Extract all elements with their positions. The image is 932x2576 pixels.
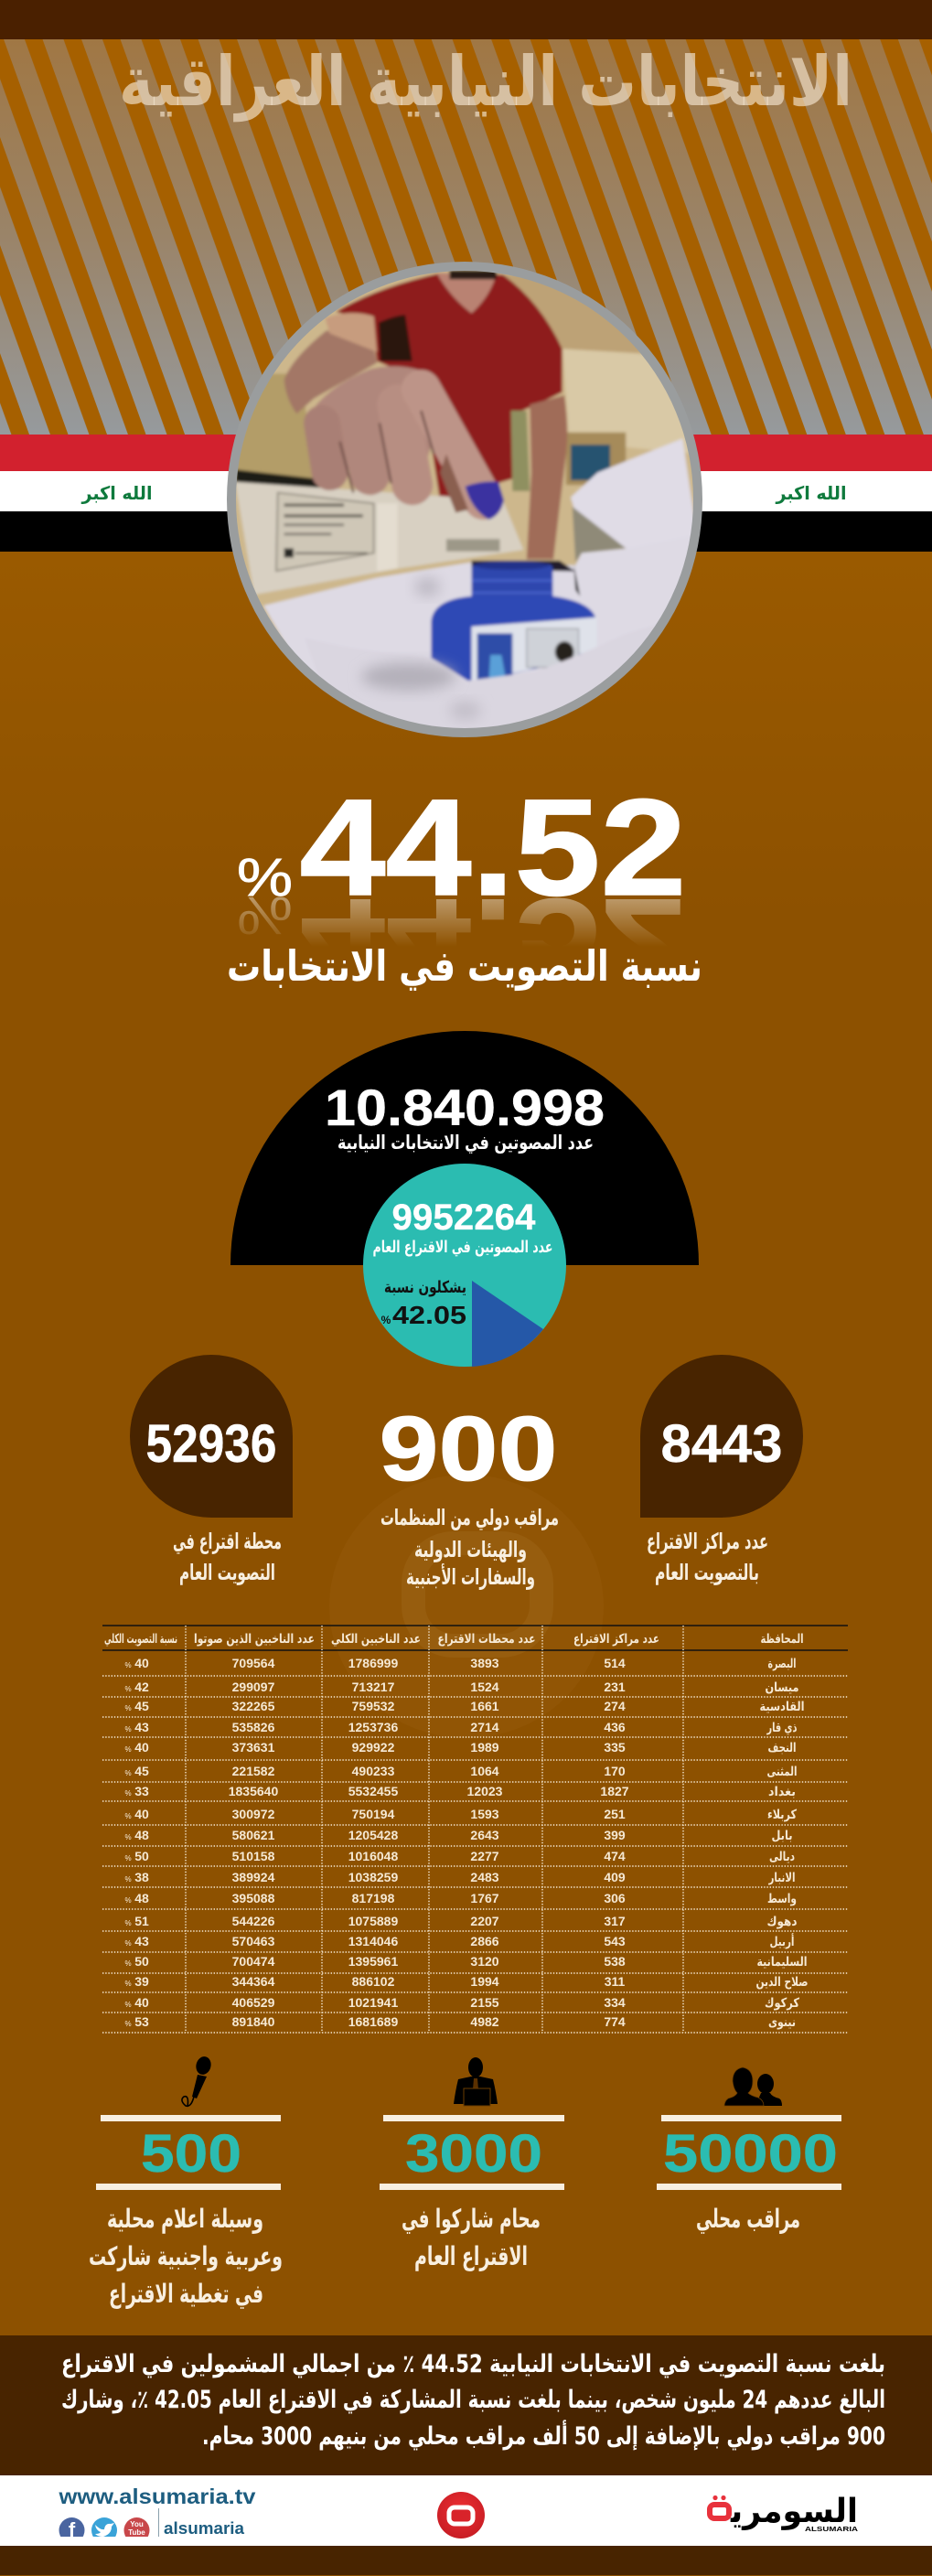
row: Muthanna: 170 [604,1764,626,1778]
headline figure 44.52 percent [237,770,686,1024]
row: Nineveh: 53 [134,2014,149,2029]
row: Anbar: % [124,1875,132,1884]
lawyers number: 3000 [405,2124,542,2184]
Alsumaria wordmark: ALSUMARIA [805,2525,859,2533]
row: Qadisiya: 274 [604,1699,626,1713]
lawyers label [402,2204,541,2271]
row: Kirkuk [124,1995,800,2011]
row: Karbala: % [124,1812,132,1820]
row: Dhi Qar: % [124,1725,132,1733]
row: Basra [124,1656,796,1671]
social icons: Tube [128,2528,145,2537]
row: Wasit: واسط [767,1892,797,1906]
row: Maysan: 713217 [352,1680,395,1694]
row: Babil [124,1828,792,1843]
row: Qadisiya: 45 [134,1699,149,1713]
row: Babil: 1205428 [348,1828,398,1842]
table: governorate results [102,1626,848,2033]
row: Dohuk: دهوك [766,1915,798,1929]
polling stations number: 52936 [146,1414,276,1474]
row: Erbil: 543 [604,1934,626,1948]
icon: two people [724,2067,782,2106]
social handle: alsumaria [164,2519,245,2538]
polling centres label [647,1529,768,1585]
row: Nineveh: 891840 [232,2014,275,2029]
row: Basra: 3893 [470,1656,499,1670]
local observers label: مراقب محلي [696,2204,800,2234]
share percent: % [381,1314,391,1326]
polling centres number: 8443 [660,1414,783,1474]
row: Sulaymaniyah: السليمانية [757,1955,807,1970]
row: Dohuk: 1075889 [348,1914,398,1928]
row: Sulaymaniyah: 1395961 [348,1954,398,1969]
row: Salah al-Din: 39 [134,1974,149,1989]
row: Sulaymaniyah: 3120 [470,1954,499,1969]
row: Dhi Qar: 436 [604,1720,626,1734]
row: Salah al-Din: 1994 [470,1974,499,1989]
row: Kirkuk: كركوك [765,1996,800,2011]
bottom bar [0,2546,932,2576]
percent sign: % [237,848,293,907]
row: Anbar: 38 [134,1870,149,1884]
row: Dohuk: 2207 [470,1914,499,1928]
row: Erbil: أربيل [770,1933,794,1949]
row: Qadisiya: % [124,1704,132,1712]
website url: www.alsumaria.tv [58,2485,256,2508]
row: Dohuk: % [124,1919,132,1927]
watermark logo [329,1475,604,1738]
row: Dohuk: 544226 [232,1914,275,1928]
panel: international observers [379,1398,559,1590]
row: Diyala: 50 [134,1849,149,1863]
row: Karbala: كربلاء [767,1808,798,1822]
row: Dohuk: 317 [604,1914,626,1928]
row: Diyala: 510158 [232,1849,275,1863]
panel: summary paragraph: البالغ عددهم 24 مليون شخص، بينما بلغت نسبة المشاركة في الاقتراع العام 42.05 ٪، وشارك [61,2386,885,2414]
row: Karbala: 750194 [352,1807,395,1821]
row: Muthanna [124,1764,798,1779]
row: Diyala: 474 [604,1849,626,1863]
total voters number: 10.840.998 [325,1079,605,1136]
row: Maysan: 231 [604,1680,626,1694]
row: Salah al-Din: 886102 [352,1974,395,1989]
polling stations label: التصويت العام [179,1560,275,1585]
row: Sulaymaniyah: 700474 [232,1954,275,1969]
row: Dhi Qar [124,1720,798,1736]
panel: lawyers [380,2057,564,2271]
polling stations label: محطة اقتراع في [173,1529,282,1554]
icon: lawyer at podium [454,2057,498,2106]
social icons: f [69,2518,76,2541]
flag text left: الله اكبر [81,482,152,504]
row: Kirkuk: % [124,2001,132,2009]
footer website and social [59,2488,256,2537]
row: Anbar: 389924 [232,1870,275,1884]
row: Dhi Qar: ذي قار [766,1721,798,1736]
row: Nineveh: 4982 [470,2014,499,2029]
total voters caption: عدد المصوتين في الانتخابات النيابية [337,1132,594,1154]
panel: polling centres [640,1355,803,1585]
row: Wasit: 395088 [232,1891,275,1905]
panel: summary paragraph [0,2335,932,2475]
row: Nineveh [124,2014,796,2030]
row: Nineveh: 774 [604,2014,626,2029]
row: Baghdad: % [124,1789,132,1798]
row: Qadisiya: 322265 [232,1699,275,1713]
row: Qadisiya: القادسية [759,1700,805,1714]
pie wedge [472,1281,543,1367]
row: Maysan: 1524 [470,1680,499,1694]
number: 44.52 [300,770,686,924]
row: Wasit: 817198 [352,1891,395,1905]
flag text right: الله اكبر [776,482,847,504]
row: Anbar [124,1870,796,1885]
row: Basra: % [124,1661,132,1669]
share caption: يشكلون نسبة [384,1278,466,1297]
row: Kirkuk: 2155 [470,1995,499,2010]
flag band [0,435,932,552]
row: Erbil: 2866 [470,1934,499,1948]
row: Baghdad: 1827 [600,1784,629,1798]
row: Salah al-Din: 311 [605,1974,626,1989]
row: Salah al-Din: 344364 [232,1974,275,1989]
row: Erbil: 1314046 [348,1934,398,1948]
share number: 42.05 [392,1301,466,1329]
social icons [59,2517,150,2537]
row: Najaf: 335 [604,1740,626,1755]
row: Dhi Qar: 1253736 [348,1720,398,1734]
row: Muthanna: 1064 [470,1764,499,1778]
table header: عدد الناخبين الكلي [331,1632,421,1647]
social icons: You [130,2520,144,2528]
Alsumaria wordmark: السومري‍ [730,2493,858,2530]
table header: عدد مراكز الاقتراع [573,1632,659,1647]
row: Baghdad: بغداد [768,1785,796,1799]
row: Wasit: 1767 [470,1891,499,1905]
pie chart: general vote share [363,1164,566,1367]
row: Basra: 514 [604,1656,626,1670]
general voters number: 9952264 [391,1197,536,1238]
footer white band [0,2475,932,2546]
row: Qadisiya: 1661 [470,1699,499,1713]
reflection: 44.52 [300,870,686,1024]
row: Nineveh: % [124,2020,132,2028]
row: Babil: بابل [772,1829,792,1843]
table header: عدد الناخبين الذين صوتوا [194,1632,315,1647]
row: Salah al-Din: % [124,1980,132,1988]
row: Wasit [124,1891,797,1906]
row: Anbar: 2483 [470,1870,499,1884]
row: Baghdad [124,1784,796,1799]
table header: المحافظة [761,1632,803,1647]
row: Basra: البصرة [768,1657,796,1671]
media label: وعربية واجنبية شاركت [89,2241,283,2271]
row: Anbar: 409 [604,1870,626,1884]
row: Babil: % [124,1833,132,1841]
row: Dohuk [124,1914,798,1929]
local observers number: 50000 [663,2124,838,2184]
row: Karbala [124,1807,798,1822]
row: Karbala: 251 [604,1807,626,1821]
media label [89,2204,283,2309]
row: Sulaymaniyah: 538 [604,1954,626,1969]
row: Babil: 399 [604,1828,626,1842]
row: Maysan: 42 [134,1680,149,1694]
panel: total voters semicircle [230,1031,699,1265]
row: Maysan: ميسان [765,1680,799,1695]
row: Muthanna: % [124,1769,132,1777]
row: Kirkuk: 40 [134,1995,149,2010]
row: Najaf: % [124,1745,132,1754]
panel: local observers [657,2067,841,2234]
row: Sulaymaniyah: 50 [134,1954,149,1969]
observers label: والهيئات الدولية [414,1537,527,1562]
row: Dhi Qar: 535826 [232,1720,275,1734]
row: Najaf: النجف [768,1741,796,1755]
row: Basra: 1786999 [348,1656,398,1670]
row: Muthanna: المثنى [766,1765,798,1779]
observers label [380,1505,559,1590]
row: Babil: 48 [134,1828,149,1842]
row: Qadisiya: 759532 [352,1699,395,1713]
polling centres label: عدد مراكز الاقتراع [647,1529,768,1554]
row: Basra: 40 [134,1656,149,1670]
row: Baghdad: 1835640 [229,1784,278,1798]
row: Baghdad: 5532455 [348,1784,398,1798]
media label: في تغطية الاقتراع [109,2279,263,2309]
row: Kirkuk: 334 [604,1995,626,2010]
row: Muthanna: 45 [134,1764,149,1778]
media label: وسيلة اعلام محلية [107,2204,263,2234]
row: Salah al-Din [124,1974,809,1990]
media number: 500 [141,2124,241,2184]
panel: polling stations [130,1355,293,1585]
row: Muthanna: 221582 [232,1764,275,1778]
row: Erbil: 43 [134,1934,149,1948]
row: Karbala: 1593 [470,1807,499,1821]
row: Maysan: 299097 [232,1680,275,1694]
footer red logo [437,2492,485,2538]
observers number: 900 [379,1398,558,1500]
top bar [0,0,932,39]
row: Kirkuk: 406529 [232,1995,275,2010]
row: Erbil: % [124,1939,132,1948]
row: Najaf: 373631 [232,1740,275,1755]
row: Erbil [124,1933,794,1949]
row: Babil: 2643 [470,1828,499,1842]
row: Dhi Qar: 2714 [470,1720,499,1734]
header striped panel [0,39,932,435]
row: Diyala: % [124,1854,132,1862]
row: Wasit: 306 [604,1891,626,1905]
row: Diyala: 1016048 [348,1849,398,1863]
row: Baghdad: 12023 [467,1784,503,1798]
row: Najaf: 929922 [352,1740,395,1755]
polling stations label [173,1529,282,1585]
polling centres label: بالتصويت العام [655,1560,759,1585]
general voters caption: عدد المصوتين في الاقتراع العام [373,1238,552,1257]
row: Salah al-Din: صلاح الدين [755,1975,809,1990]
table header [104,1632,803,1647]
row: Diyala: 2277 [470,1849,499,1863]
row: Baghdad: 33 [134,1784,149,1798]
row: Dohuk: 51 [134,1914,149,1928]
row: Diyala: ديالى [769,1850,795,1864]
row: Najaf: 1989 [470,1740,499,1755]
table header: عدد محطات الاقتراع [437,1632,536,1647]
row: Anbar: 1038259 [348,1870,398,1884]
row: Basra: 709564 [232,1656,275,1670]
table header: نسبة التصويت الكلي [104,1632,177,1647]
row: Qadisiya [124,1699,805,1714]
row: Dhi Qar: 43 [134,1720,149,1734]
panel: summary paragraph: 900 مراقب دولي بالإضافة إلى 50 ألف مراقب محلي من بنيهم 3000 محام. [202,2420,885,2451]
headline caption: نسبة التصويت في الانتخابات [227,941,702,991]
row: Wasit: % [124,1896,132,1905]
row: Nineveh: نينوى [768,2015,796,2030]
row: Kirkuk: 1021941 [348,1995,398,2010]
lawyers label: محام شاركوا في [402,2204,541,2234]
row: Najaf [124,1740,796,1755]
observers label: والسفارات الأجنبية [406,1563,535,1590]
row: Erbil: 570463 [232,1934,275,1948]
lawyers label: الاقتراع العام [414,2241,528,2271]
observers label: مراقب دولي من المنظمات [380,1505,559,1530]
row: Sulaymaniyah: % [124,1959,132,1968]
row: Karbala: 40 [134,1807,149,1821]
row: Diyala [124,1849,795,1864]
reflection: % [237,886,293,945]
icon: microphone [182,2055,213,2107]
row: Babil: 580621 [232,1828,275,1842]
row: Anbar: الانبار [768,1871,796,1885]
row: Nineveh: 1681689 [348,2014,398,2029]
row: Maysan [124,1680,799,1695]
panel: media outlets [89,2055,283,2309]
row: Maysan: % [124,1685,132,1693]
row: Muthanna: 490233 [352,1764,395,1778]
circular photo: inked finger over ink bottle [227,262,702,737]
row: Sulaymaniyah [124,1954,807,1970]
row: Wasit: 48 [134,1891,149,1905]
row: Karbala: 300972 [232,1807,275,1821]
row: Najaf: 40 [134,1740,149,1755]
